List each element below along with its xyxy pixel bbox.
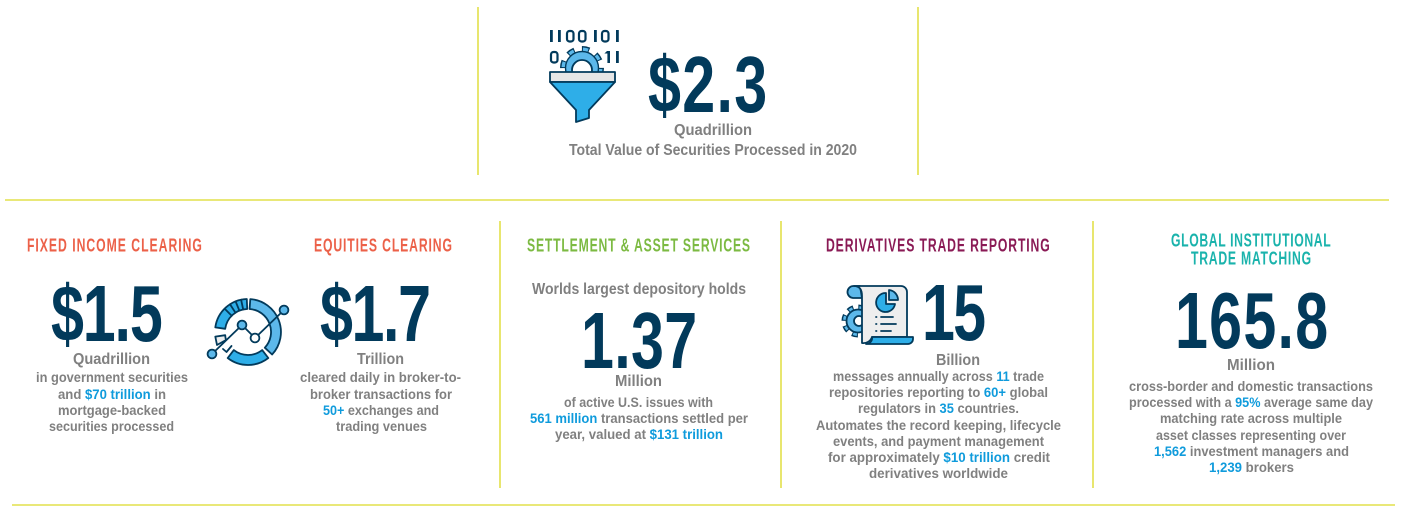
- description: equities: trading venues: [336, 419, 427, 434]
- panel: equities clearing: [300, 236, 461, 434]
- icon: report scroll with gear: [845, 286, 913, 344]
- heading: equities clearing: EQUITIES CLEARING: [314, 236, 452, 256]
- description: derivatives: for approximately $10 trillion credit: [828, 450, 1050, 465]
- description: equities: [300, 370, 461, 434]
- big number: 165.8: 165.8: [1175, 275, 1328, 365]
- heading: derivatives trade reporting: DERIVATIVES TRADE REPORTING: [826, 236, 1050, 256]
- description: equities: 50+ exchanges and: [323, 403, 439, 418]
- heading: global institutional trade matching: GLOBAL INSTITUTIONAL: [1171, 231, 1331, 251]
- panel: total value of securities: [550, 30, 857, 159]
- big number: $2.3: $2.3: [648, 39, 767, 129]
- description: trade matching: 1,239 brokers: [1209, 460, 1294, 475]
- icon: donut chart with trend line: [208, 299, 288, 365]
- description: equities: cleared daily in broker-to-: [300, 370, 461, 385]
- big number: 1.37: 1.37: [581, 295, 697, 385]
- description: settlement: 561 million transactions settled per: [530, 411, 749, 426]
- description: fixed income: in government securities: [36, 370, 188, 385]
- description: trade matching: matching rate across multiple: [1160, 411, 1342, 426]
- description: settlement: of active U.S. issues with: [564, 395, 713, 410]
- description: settlement: year, valued at $131 trillion: [555, 427, 723, 442]
- description: derivatives: Automates the record keeping, lifecycle: [816, 418, 1061, 433]
- description: trade matching: 1,562 investment managers and: [1154, 444, 1349, 459]
- panel: fixed income clearing: [27, 236, 202, 434]
- big number: $1.7: $1.7: [320, 268, 431, 358]
- heading: settlement and asset services: SETTLEMENT & ASSET SERVICES: [527, 236, 750, 256]
- caption: total value: Total Value of Securities Processed in 2020: [569, 142, 857, 159]
- description: fixed income: securities processed: [49, 419, 174, 434]
- description: fixed income: mortgage-backed: [58, 403, 166, 418]
- description: derivatives: [816, 369, 1061, 481]
- big number: $1.5: $1.5: [51, 268, 163, 358]
- description: trade matching: [1129, 379, 1373, 475]
- panel: settlement and asset services: [527, 236, 750, 442]
- description: derivatives: derivatives worldwide: [869, 466, 1008, 481]
- label: Trillion: Trillion: [357, 351, 404, 368]
- label: Quadrillion: Quadrillion: [73, 351, 150, 368]
- big number: 15: 15: [922, 267, 986, 357]
- description: trade matching: processed with a 95% average same day: [1129, 395, 1373, 410]
- label: Million: Million: [1227, 357, 1275, 374]
- description: trade matching: asset classes representing over: [1156, 428, 1347, 443]
- description: fixed income: and $70 trillion in: [58, 387, 166, 402]
- heading: global institutional trade matching: TRADE MATCHING: [1191, 249, 1311, 269]
- description: derivatives: regulators in 35 countries.: [858, 401, 1019, 416]
- description: derivatives: events, and payment management: [833, 434, 1044, 449]
- label: Million: Million: [615, 373, 662, 390]
- icon: data funnel with gear: [550, 30, 619, 122]
- label: Billion: Billion: [936, 352, 980, 369]
- description: settlement: [530, 395, 749, 442]
- panel: global institutional trade matching: [1129, 231, 1373, 475]
- description: trade matching: cross-border and domestic transactions: [1129, 379, 1373, 394]
- description: derivatives: repositories reporting to 60+ global: [829, 385, 1048, 400]
- description: derivatives: messages annually across 11 trade: [833, 369, 1044, 384]
- heading: global institutional trade matching: [1171, 231, 1331, 269]
- description: equities: broker transactions for: [310, 387, 453, 402]
- intro: worlds largest depository: Worlds largest depository holds: [532, 281, 746, 298]
- description: fixed income: [36, 370, 188, 434]
- heading: fixed income clearing: FIXED INCOME CLEARING: [27, 236, 202, 256]
- panel: derivatives trade reporting: [816, 236, 1061, 481]
- label: Quadrillion: Quadrillion: [674, 122, 752, 139]
